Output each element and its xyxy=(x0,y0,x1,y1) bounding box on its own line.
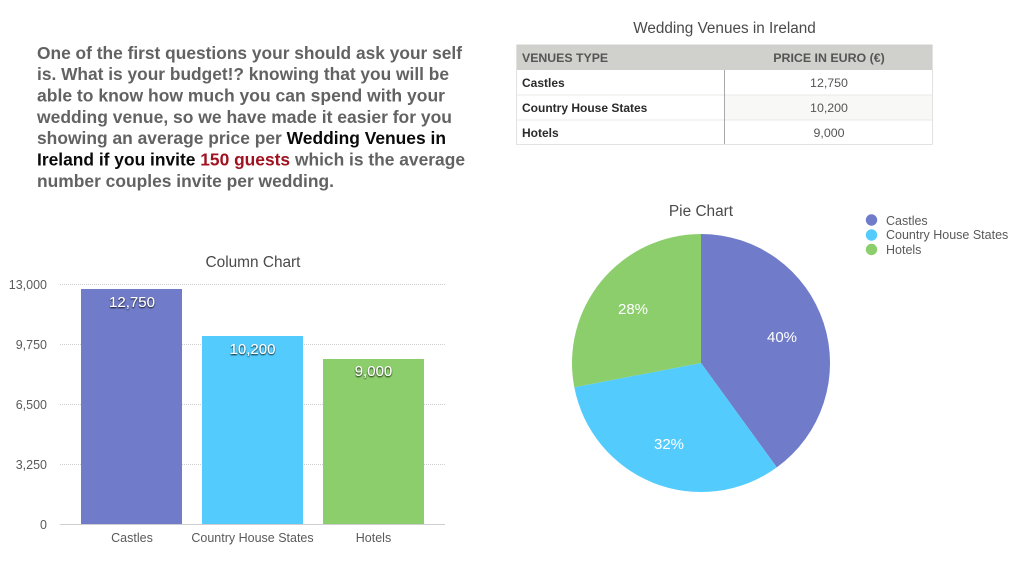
table row: Castles xyxy=(516,70,932,95)
intro text block: One of the first questions your should ask your self xyxy=(37,43,462,63)
pie slice: Hotels 28% xyxy=(572,234,701,387)
intro text block: number couples invite per wedding. xyxy=(37,171,334,191)
table row: Hotels: 9,000 xyxy=(813,126,845,140)
intro text block: wedding venue, so we have made it easier for you xyxy=(36,107,452,127)
pie slice: Hotels 28%: 28% xyxy=(618,301,648,318)
pie legend: Country House States xyxy=(886,228,1008,242)
y axis labels xyxy=(9,278,47,532)
pie slice: Country House States 32% xyxy=(574,363,777,492)
table: wedding venues in Ireland xyxy=(516,20,932,144)
table row: Castles: Castles xyxy=(522,76,565,90)
table header row xyxy=(516,44,932,70)
pie legend xyxy=(866,214,1008,257)
intro text block: Ireland if you invite 150 guests which is the average xyxy=(37,150,465,170)
y axis labels: 3,250 xyxy=(16,458,47,472)
column chart xyxy=(9,254,445,545)
pie chart title: Pie Chart xyxy=(669,203,734,220)
bar: Castles 12,750 xyxy=(81,289,182,524)
intro text block: able to know how much you can spend with your xyxy=(37,86,445,106)
table row: Country House States: Country House States xyxy=(522,101,648,115)
pie slice: Castles 40% xyxy=(701,234,830,467)
bar: Castles 12,750: 12,750 xyxy=(109,294,155,311)
y axis labels: 9,750 xyxy=(16,338,47,352)
bar: Hotels 9,000 xyxy=(323,359,424,524)
intro text block: is. What is your budget!? knowing that you will be xyxy=(37,64,449,84)
pie legend: Hotels xyxy=(886,243,921,257)
pie legend: Castles xyxy=(886,214,928,228)
bar: Country House States 10,200 xyxy=(202,336,303,524)
x axis labels: Castles xyxy=(111,531,153,545)
table row: Country House States: 10,200 xyxy=(810,101,848,115)
pie slice: Castles 40%: 40% xyxy=(767,329,797,346)
column chart title: Column Chart xyxy=(206,254,301,271)
table row: Hotels: Hotels xyxy=(522,126,559,140)
table header row: VENUES TYPE xyxy=(522,51,608,65)
pie chart xyxy=(572,203,1008,492)
table row: Country House States xyxy=(522,95,932,120)
pie slice: Country House States 32%: 32% xyxy=(654,436,684,453)
y axis labels: 6,500 xyxy=(16,398,47,412)
bar: Country House States 10,200: 10,200 xyxy=(230,341,275,358)
table title: Wedding Venues in Ireland xyxy=(633,20,816,37)
table header row: PRICE IN EURO (€) xyxy=(773,51,885,65)
table row: Castles: 12,750 xyxy=(810,76,848,90)
intro text block xyxy=(36,43,465,191)
intro text block: showing an average price per Wedding Venues in xyxy=(37,128,446,148)
x axis labels: Country House States xyxy=(191,531,314,545)
y axis labels: 0 xyxy=(40,518,47,532)
table row: Hotels xyxy=(522,126,845,140)
bar: Hotels 9,000: 9,000 xyxy=(355,363,392,380)
x axis labels: Hotels xyxy=(356,531,391,545)
y axis labels: 13,000 xyxy=(9,278,47,292)
x axis labels xyxy=(111,531,391,545)
